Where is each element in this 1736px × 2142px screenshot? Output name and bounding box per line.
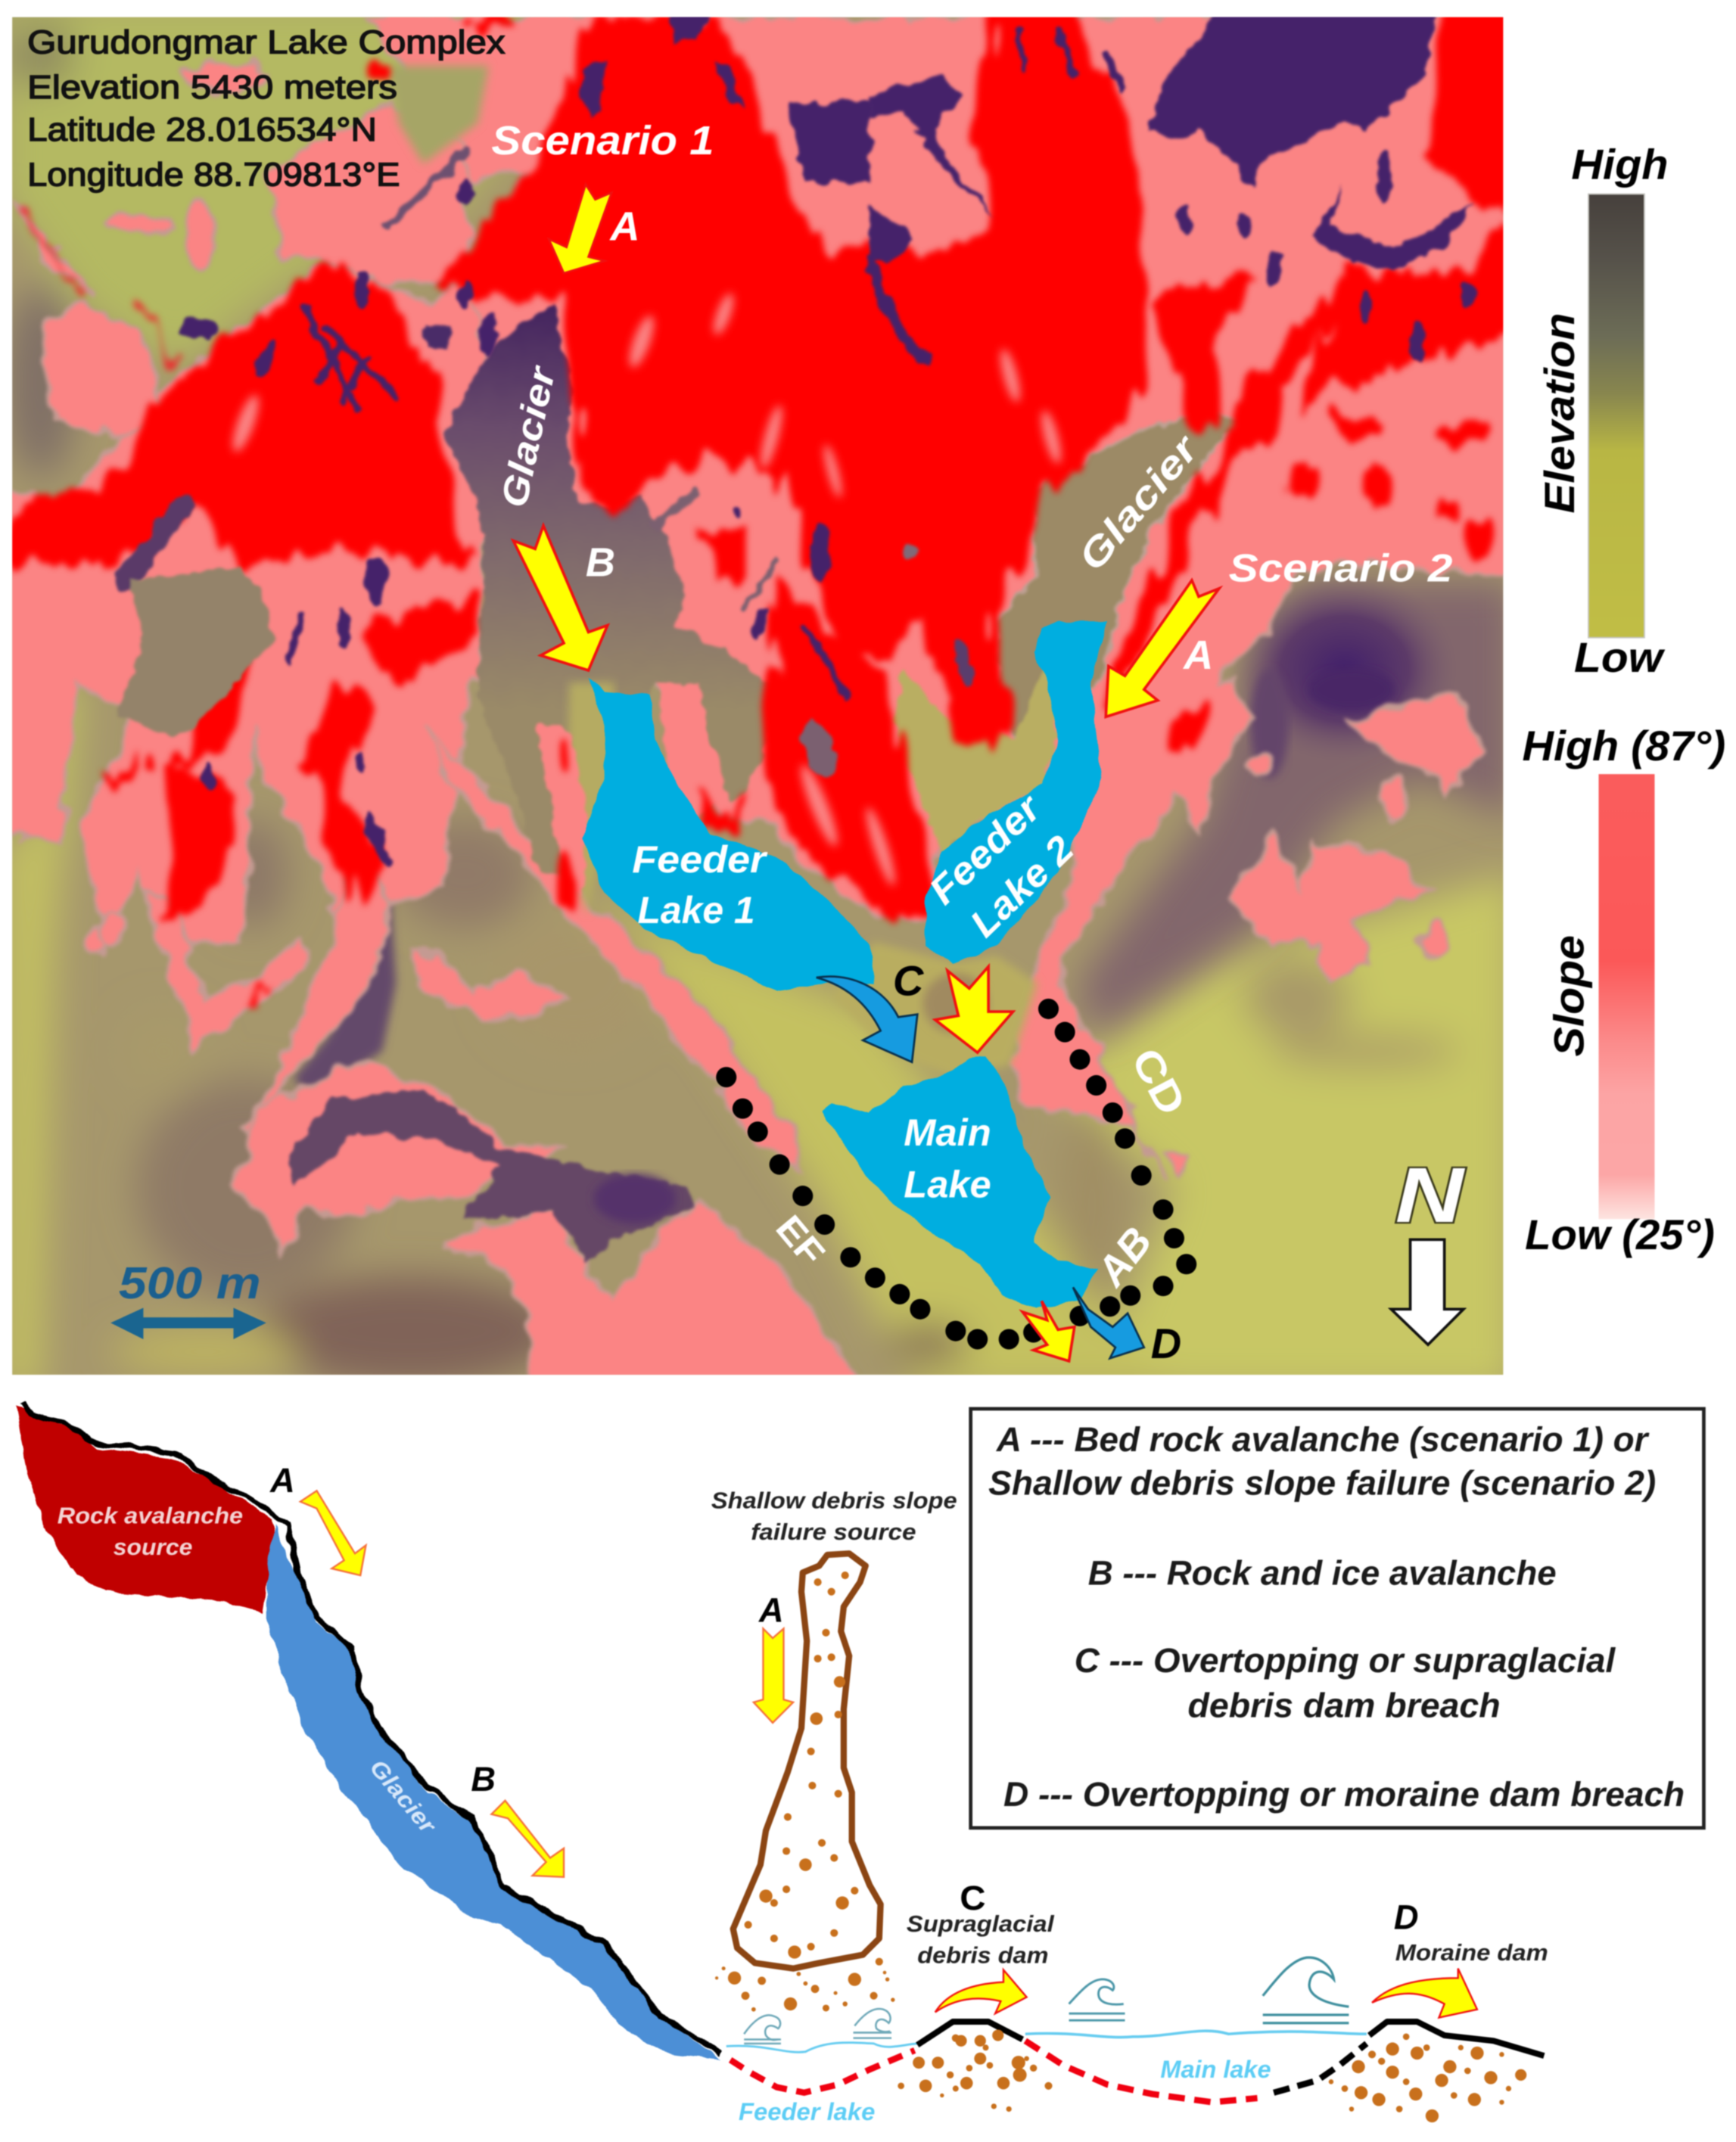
terrain: darkest point of ridge [594, 1174, 676, 1223]
dotted line: dam margin [716, 999, 1196, 1350]
terrain patch: olive inside NW slopes [389, 66, 489, 164]
label: moraine dam: Moraine dam [1395, 1940, 1548, 1966]
label: shallow debris: Shallow debris slope [711, 1488, 957, 1514]
arrow: D overtopping [1372, 1969, 1477, 2018]
slope layer: red [0, 0, 1515, 1013]
scale bar [110, 1258, 266, 1339]
label: supraglacial debris dam: debris dam [917, 1942, 1048, 1968]
arrow: A scenario 1 [549, 185, 611, 273]
info text: Longitude 88.709813°E [27, 157, 400, 194]
rock avalanche source: source [114, 1534, 192, 1560]
map labels: Scenario 2 [1229, 547, 1452, 591]
label: D on map: D [1151, 1320, 1181, 1367]
map labels: Glacier [493, 361, 564, 511]
terrain hollow: glacier 2 [997, 412, 1245, 737]
label: C on map: C [893, 956, 925, 1004]
info text: Latitude 28.016534°N [27, 112, 377, 148]
map labels [491, 118, 1452, 1295]
label: D section: D [1394, 1898, 1418, 1936]
label: shallow debris [711, 1488, 957, 1545]
label: supraglacial debris dam: Supraglacial [907, 1911, 1055, 1937]
wave: medium [1069, 1979, 1125, 2020]
map labels: Main [904, 1111, 991, 1154]
legend box: B --- Rock and ice avalanche [1088, 1554, 1557, 1593]
legend: slope [1522, 722, 1725, 1258]
map labels: Scenario 1 [491, 118, 714, 163]
slope layer: purple [126, 8, 1474, 869]
lake: main lake [822, 1055, 1097, 1307]
map labels: CD [1122, 1041, 1194, 1123]
glacier [266, 1524, 721, 2059]
rock avalanche source: Rock avalanche [58, 1503, 243, 1529]
terrain base [0, 0, 1515, 1392]
panel: terrain map [0, 0, 1515, 1392]
terrain: between lakes [832, 942, 1038, 1078]
map labels: AB [1087, 1219, 1161, 1295]
wave: small 1 [744, 2015, 781, 2044]
label: feeder lake: Feeder lake [739, 2098, 875, 2125]
label: B slope: B [471, 1760, 496, 1798]
slope streaks: pink on red [228, 291, 1065, 888]
dam C surface [917, 2022, 1022, 2045]
info text: Gurudongmar Lake Complex [27, 25, 506, 61]
label: supraglacial debris dam [907, 1911, 1055, 1968]
water line: main lake [1025, 2031, 1367, 2038]
label: A slope: A [269, 1461, 295, 1500]
legend box: C --- Overtopping or supraglacial [1075, 1641, 1616, 1680]
map labels: B [586, 540, 615, 586]
arrow: C overtopping [935, 1969, 1027, 2013]
legend box: A --- Bed rock avalanche (scenario 1) or [996, 1420, 1650, 1459]
legend: elevation: Elevation [1535, 312, 1583, 514]
map labels: Glacier [1069, 426, 1208, 579]
arrow: D yellow [1022, 1301, 1075, 1361]
north arrow [1391, 1152, 1465, 1345]
map labels: EF [767, 1208, 832, 1273]
terrain hollow: olive by lake 1 [567, 682, 614, 915]
arrow: C blue [817, 977, 917, 1062]
map labels: A [1182, 633, 1213, 678]
legend: slope: High (87°) [1522, 722, 1725, 769]
lake: feeder lake 1 [583, 677, 875, 991]
map labels: Lake [904, 1162, 991, 1205]
legend box: D --- Overtopping or moraine dam breach [1003, 1775, 1685, 1814]
arrow: B [513, 526, 608, 670]
scale bar: 500 m [119, 1258, 261, 1308]
arrow: A slope [300, 1491, 366, 1575]
info text [27, 25, 506, 194]
info text: Elevation 5430 meters [27, 70, 397, 106]
map labels: A [608, 204, 639, 250]
slope layer: pink [0, 17, 1515, 1392]
label: main lake: Main lake [1160, 2056, 1271, 2083]
moraine lake bed [1274, 2044, 1367, 2093]
slope: pink spots west of lake 1 [535, 723, 587, 901]
legend: elevation: Low [1574, 633, 1666, 681]
legend box [971, 1409, 1703, 1828]
terrain: brown at C [923, 974, 988, 1034]
rock avalanche source [17, 1406, 275, 1612]
label: shallow debris: failure source [751, 1519, 916, 1545]
terrain: lower-left dark mauve ridge [288, 1090, 693, 1264]
map labels: Feeder [920, 785, 1050, 912]
label: C section: C [960, 1879, 986, 1917]
arrow: D blue [1073, 1287, 1144, 1358]
arrow: A scenario 2 [1106, 580, 1219, 717]
arrow: C yellow [935, 966, 1013, 1052]
dam C debris [898, 2029, 1053, 2112]
main lake bed [1025, 2041, 1258, 2102]
debris source outline [733, 1553, 881, 1969]
slope profile line [22, 1402, 721, 2053]
label: A debris: A [758, 1590, 784, 1629]
glacier: Glacier [365, 1755, 441, 1839]
map labels: Lake 2 [962, 827, 1082, 945]
wave: small 2 [854, 2009, 891, 2038]
terrain hollow: glacier 1 [443, 305, 774, 874]
panel: cross section [17, 1402, 1548, 2125]
legend box: Shallow debris slope failure (scenario 2) [988, 1464, 1656, 1503]
legend: slope: Slope [1545, 935, 1593, 1057]
lake: feeder lake 2 [926, 621, 1107, 964]
map labels: Lake 1 [637, 888, 755, 931]
terrain: olive between slopes [894, 655, 1058, 853]
dam D debris [1329, 2034, 1526, 2122]
terrain: brown hollow on left slope [116, 567, 273, 737]
legend: elevation [1535, 141, 1669, 681]
water line: feeder lake [726, 2043, 917, 2052]
legend: elevation: High [1571, 141, 1669, 188]
wave: large [1263, 1957, 1349, 2023]
legend box: debris dam breach [1188, 1687, 1501, 1725]
debris particles [715, 1572, 895, 2012]
arrow: A debris [754, 1628, 793, 1723]
legend: slope: Low (25°) [1525, 1211, 1715, 1258]
arrow: B slope [491, 1801, 564, 1877]
feeder lake bed [730, 2050, 915, 2093]
dam D surface [1369, 2022, 1544, 2056]
map labels: Feeder [632, 838, 768, 881]
north arrow: N [1395, 1152, 1465, 1239]
slope: pink east of lake 1 [658, 682, 723, 819]
